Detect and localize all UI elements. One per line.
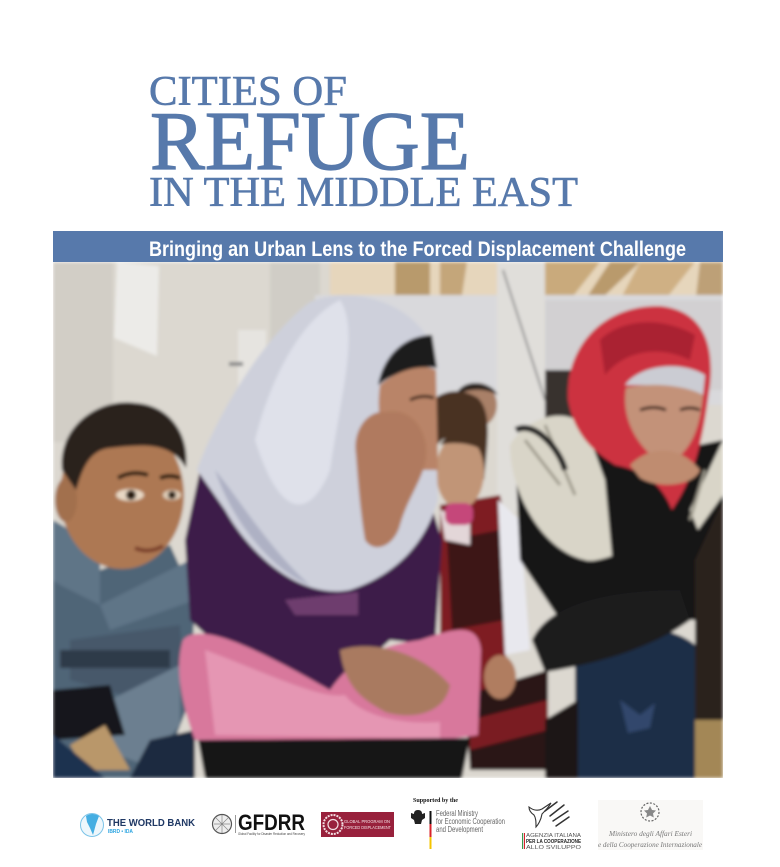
photo background: shelter walls and ceiling <box>53 262 723 778</box>
logo: Federal Ministry for Economic Cooperation and Development <box>411 797 505 849</box>
photo: refugee family in shelter <box>53 262 723 778</box>
logo: GFDRR <box>212 810 305 836</box>
title: IN THE MIDDLE EAST <box>149 170 578 216</box>
logo: The World Bank <box>80 814 195 836</box>
photo: young girl <box>417 391 548 770</box>
logo: Agenzia Italiana per la Cooperazione allo Sviluppo: AGENZIA ITALIANA <box>526 833 581 839</box>
logo: Global Program on Forced Displacement: FORCED DISPLACEMENT <box>344 825 391 830</box>
photo: resting hand on bag <box>340 646 450 715</box>
photo: woman in red hijab <box>510 306 723 778</box>
logo: The World Bank: IBRD • IDA <box>108 829 133 835</box>
logo: Federal Ministry for Economic Cooperation and Development: for Economic Cooperation <box>436 817 505 826</box>
logo: GFDRR: Global Facility for Disaster Reduction and Recovery <box>238 832 305 836</box>
photo: pink bag <box>179 630 481 778</box>
photo: raised hand on cheek <box>355 411 426 547</box>
logo: GFDRR: GFDRR <box>238 810 305 835</box>
logo: Federal Ministry for Economic Cooperation and Development: Federal Ministry <box>436 809 478 818</box>
logo: Agenzia Italiana per la Cooperazione allo Sviluppo <box>522 802 582 851</box>
subtitle banner: Bringing an Urban Lens to the Forced Displacement Challenge <box>149 238 686 261</box>
logo: Federal Ministry for Economic Cooperation and Development: Supported by the <box>413 797 458 804</box>
title: CITIES OF <box>149 69 347 115</box>
logo: Ministero degli Affari Esteri: Ministero degli Affari Esteri <box>608 830 692 838</box>
logo: The World Bank: THE WORLD BANK <box>107 817 195 829</box>
title <box>149 69 578 216</box>
title: REFUGE <box>150 95 470 188</box>
logo: Global Program on Forced Displacement: GLOBAL PROGRAM ON <box>344 819 390 824</box>
logo: Federal Ministry for Economic Cooperation and Development: and Development <box>436 825 484 834</box>
logo: Global Program on Forced Displacement <box>321 812 394 837</box>
logo: Agenzia Italiana per la Cooperazione allo Sviluppo: ALLO SVILUPPO <box>526 845 582 851</box>
subtitle banner <box>53 231 723 262</box>
logo: Ministero degli Affari Esteri <box>598 800 703 850</box>
logo: Ministero degli Affari Esteri: e della Cooperazione Internazionale <box>598 841 702 849</box>
photo: boy <box>53 402 195 778</box>
photo: woman in white hijab <box>185 295 442 695</box>
logo: Agenzia Italiana per la Cooperazione allo Sviluppo: PER LA COOPERAZIONE <box>526 839 581 845</box>
